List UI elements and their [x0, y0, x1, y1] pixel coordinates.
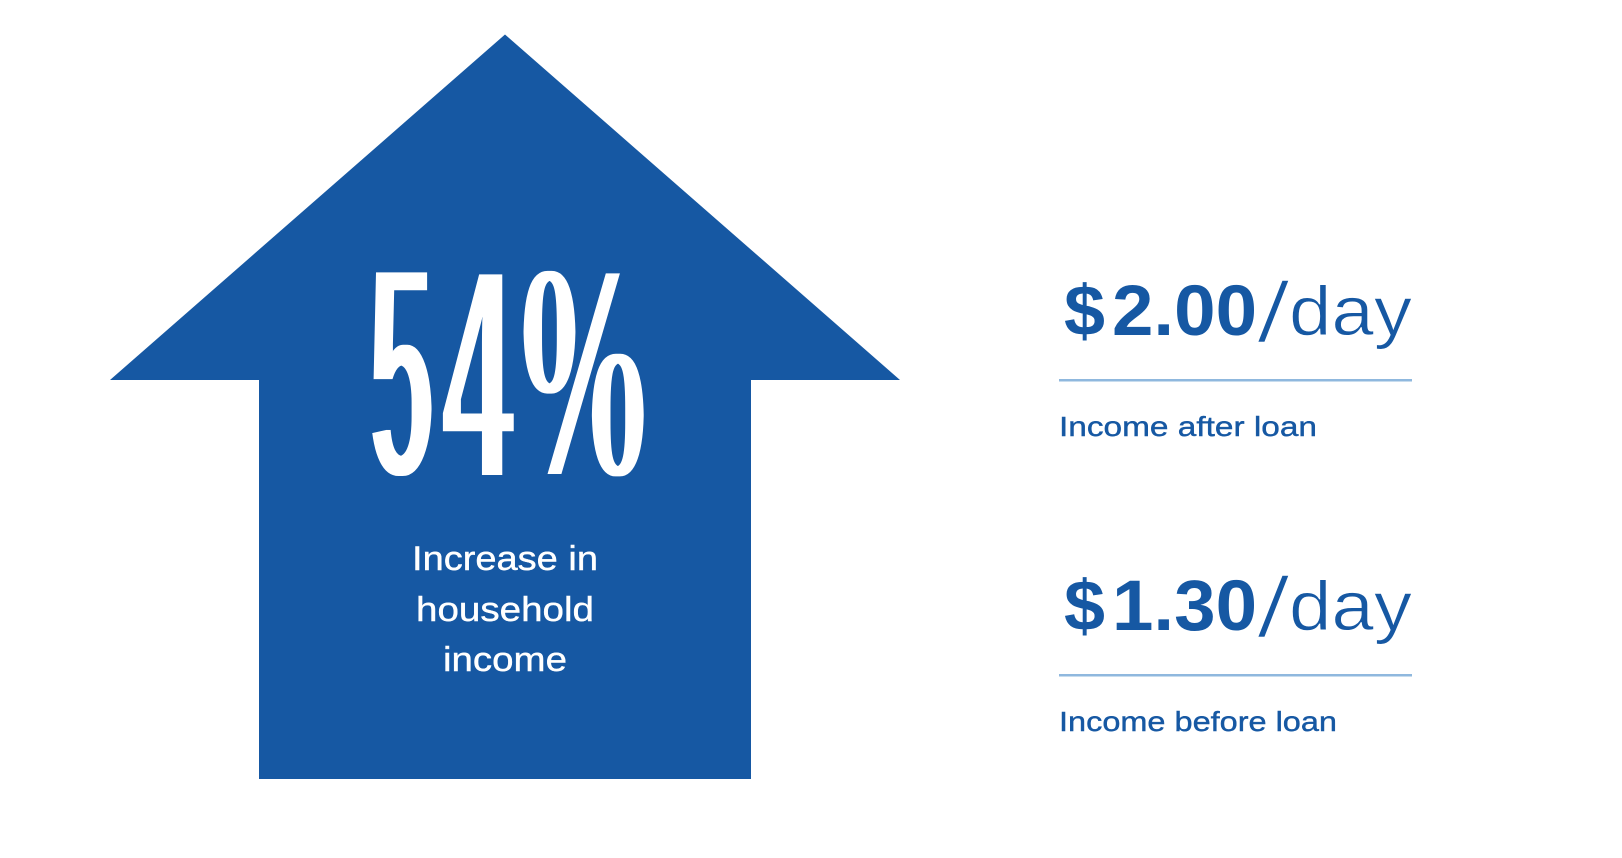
text: increase in household income: income — [443, 641, 567, 679]
icon: up arrow panel — [110, 34, 900, 779]
amount: $1.30/day — [1064, 559, 1412, 655]
big number: 54%: 4 — [443, 201, 512, 549]
text: increase in household income: Increase in — [412, 540, 598, 578]
text: increase in household income — [412, 540, 598, 679]
amount: $1.30/day: $ — [1064, 567, 1105, 646]
big number: 54% — [370, 197, 645, 549]
amount: $1.30/day: / — [1256, 559, 1291, 655]
label: income after loan: Income after loan — [1059, 411, 1317, 442]
label: income before loan: Income before loan — [1059, 706, 1337, 737]
amount: $2.00/day — [1064, 264, 1412, 360]
amount: $2.00/day: 2.00 — [1112, 272, 1257, 351]
amount: $1.30/day: day — [1289, 567, 1412, 645]
amount: $1.30/day: 1.30 — [1112, 567, 1257, 646]
amount: $2.00/day: $ — [1064, 272, 1105, 351]
stat: income after loan — [1059, 264, 1412, 442]
big number: 54%: 5 — [370, 197, 433, 546]
amount: $2.00/day: / — [1256, 264, 1291, 360]
big number: 54%: % — [522, 199, 645, 548]
stat: income before loan — [1059, 559, 1412, 737]
amount: $2.00/day: day — [1289, 272, 1412, 350]
text: increase in household income: household — [416, 591, 594, 629]
